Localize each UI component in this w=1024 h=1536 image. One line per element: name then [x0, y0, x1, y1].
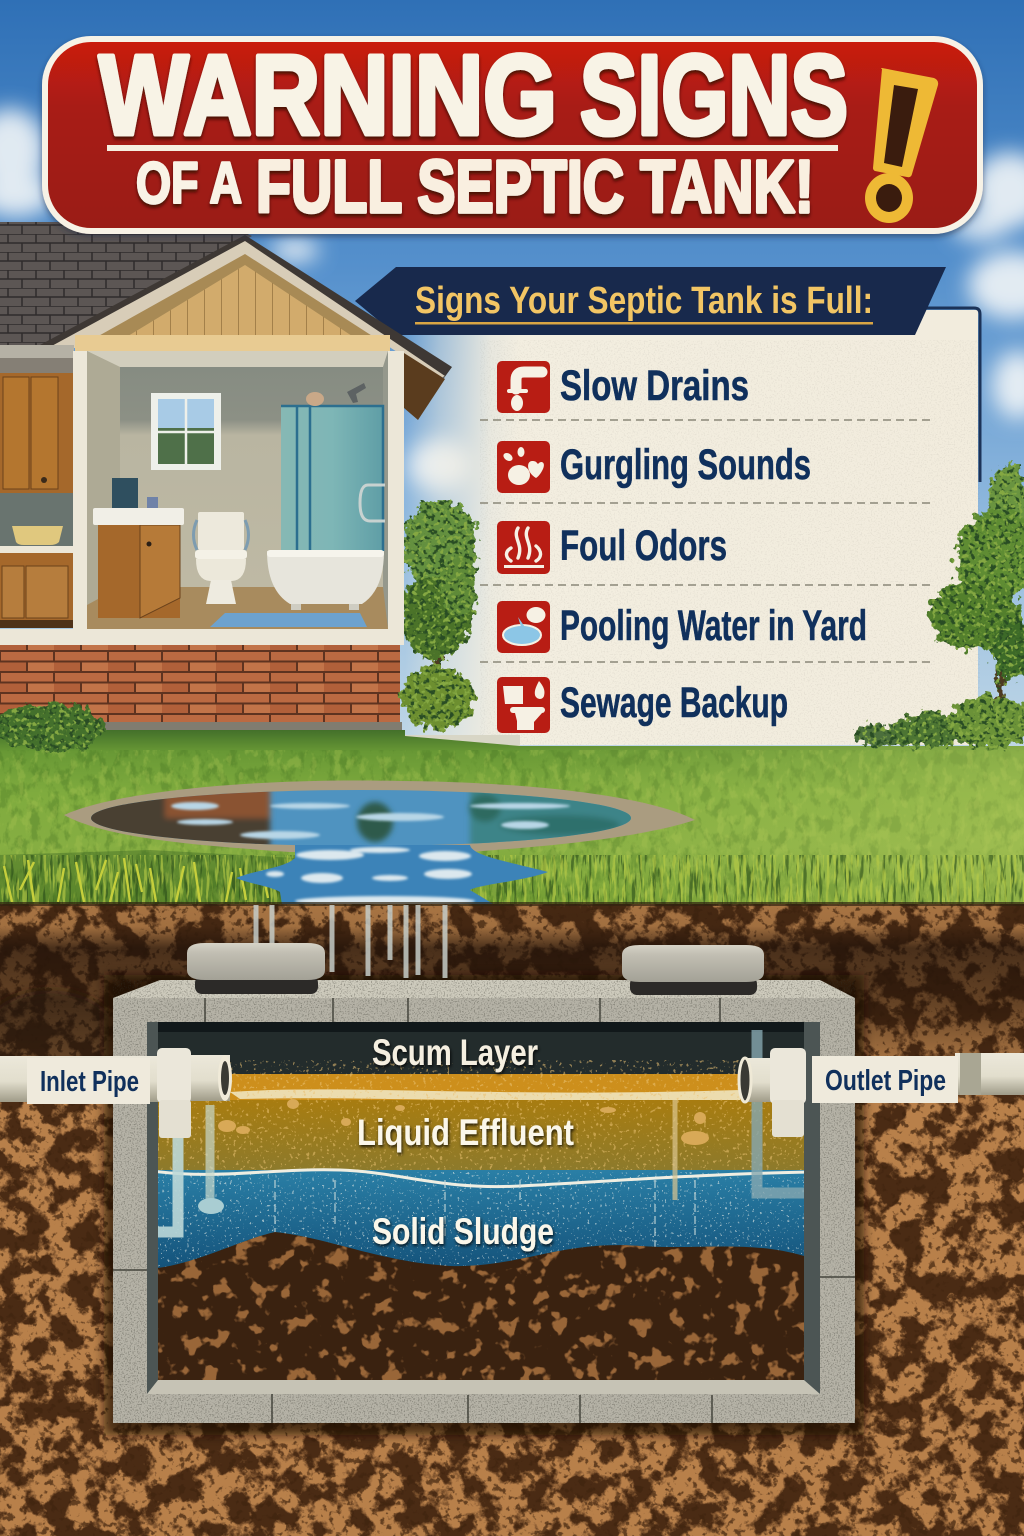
sign row: pooling water: Pooling Water in Yard [560, 602, 867, 650]
walkway [405, 735, 520, 746]
title line two: OF A [136, 151, 242, 216]
icon: pipe [497, 361, 550, 413]
roof edge and eave [40, 235, 452, 378]
tank lid: left [187, 943, 325, 994]
sign row: foul odors: Foul Odors [560, 522, 727, 570]
pond stone rim [64, 781, 695, 852]
septic tank [0, 943, 1024, 1423]
title line one: SIGNS [580, 32, 848, 158]
sign row: sewage backup [497, 677, 788, 733]
tank lid: right [622, 945, 764, 995]
gable [80, 250, 382, 336]
sign row: slow drains [497, 361, 749, 413]
house [0, 222, 452, 730]
pond water [91, 790, 631, 846]
lawn [0, 730, 1024, 910]
title banner [45, 32, 980, 231]
tree behind house [400, 501, 478, 690]
icon: exclamation mark [865, 68, 938, 223]
panel background [405, 310, 978, 745]
bath mat [210, 613, 367, 627]
label: liquid effluent: Liquid Effluent [357, 1112, 574, 1153]
sign row: pooling water [497, 601, 867, 653]
shadow around tank [104, 975, 864, 1435]
wall cutaway frame [0, 351, 404, 645]
sign row: foul odors [497, 521, 727, 574]
outlet pipe [739, 1048, 1024, 1137]
label: outlet pipe [812, 1056, 958, 1103]
water layer [158, 1170, 804, 1270]
bathroom interior [87, 351, 388, 629]
vanity with sink [93, 478, 184, 618]
toilet [194, 512, 248, 604]
icon: bubbles [497, 441, 550, 493]
bathtub [267, 550, 384, 610]
shower enclosure [281, 383, 385, 551]
sky background [0, 0, 1024, 760]
tank cavity [147, 1022, 820, 1394]
label: inlet pipe [27, 1058, 150, 1104]
tree at right [929, 463, 1024, 710]
tank contents [152, 1022, 810, 1380]
concrete shell [113, 980, 855, 1423]
sign row: gurgling sounds: Gurgling Sounds [560, 441, 811, 489]
sign row: sewage backup: Sewage Backup [560, 679, 788, 727]
inlet downpipe [158, 1130, 178, 1232]
sludge [158, 1225, 804, 1380]
brick wall [0, 645, 400, 723]
underground soil [0, 902, 1024, 1536]
window [151, 393, 221, 470]
title line two [136, 145, 814, 228]
grass blades [4, 858, 268, 902]
outlet downpipe [757, 1030, 804, 1193]
title line two: FULL SEPTIC TANK! [256, 145, 814, 228]
liquid effluent [158, 1100, 804, 1172]
banner plate [45, 39, 980, 231]
left kitchen cabinets [0, 373, 73, 628]
label: outlet pipe: Outlet Pipe [825, 1065, 946, 1097]
pooling water in yard [64, 781, 695, 906]
icon: puddle [497, 601, 550, 653]
overflow stream [236, 845, 548, 905]
panel: signs list [355, 267, 980, 745]
icon: toilet [497, 677, 550, 733]
sign row: gurgling sounds [497, 441, 811, 493]
water seeping down [256, 905, 445, 978]
bushes in front of lawn edge [0, 666, 1024, 751]
label: solid sludge: Solid Sludge [372, 1211, 554, 1252]
sign row: slow drains: Slow Drains [560, 362, 749, 410]
label: inlet pipe: Inlet Pipe [40, 1066, 139, 1098]
panel heading ribbon [355, 267, 946, 335]
panel heading: Signs Your Septic Tank is Full: [415, 280, 873, 322]
icon: stink lines [497, 521, 550, 574]
panel border [900, 308, 980, 482]
title line one: WARNING [99, 32, 557, 158]
scum band [230, 1074, 741, 1100]
roof shingles [0, 222, 252, 347]
inlet pipe [0, 1048, 232, 1138]
clouds [0, 108, 1024, 491]
roof beam [75, 335, 390, 351]
label: scum layer: Scum Layer [372, 1032, 538, 1073]
headspace [158, 1032, 804, 1074]
